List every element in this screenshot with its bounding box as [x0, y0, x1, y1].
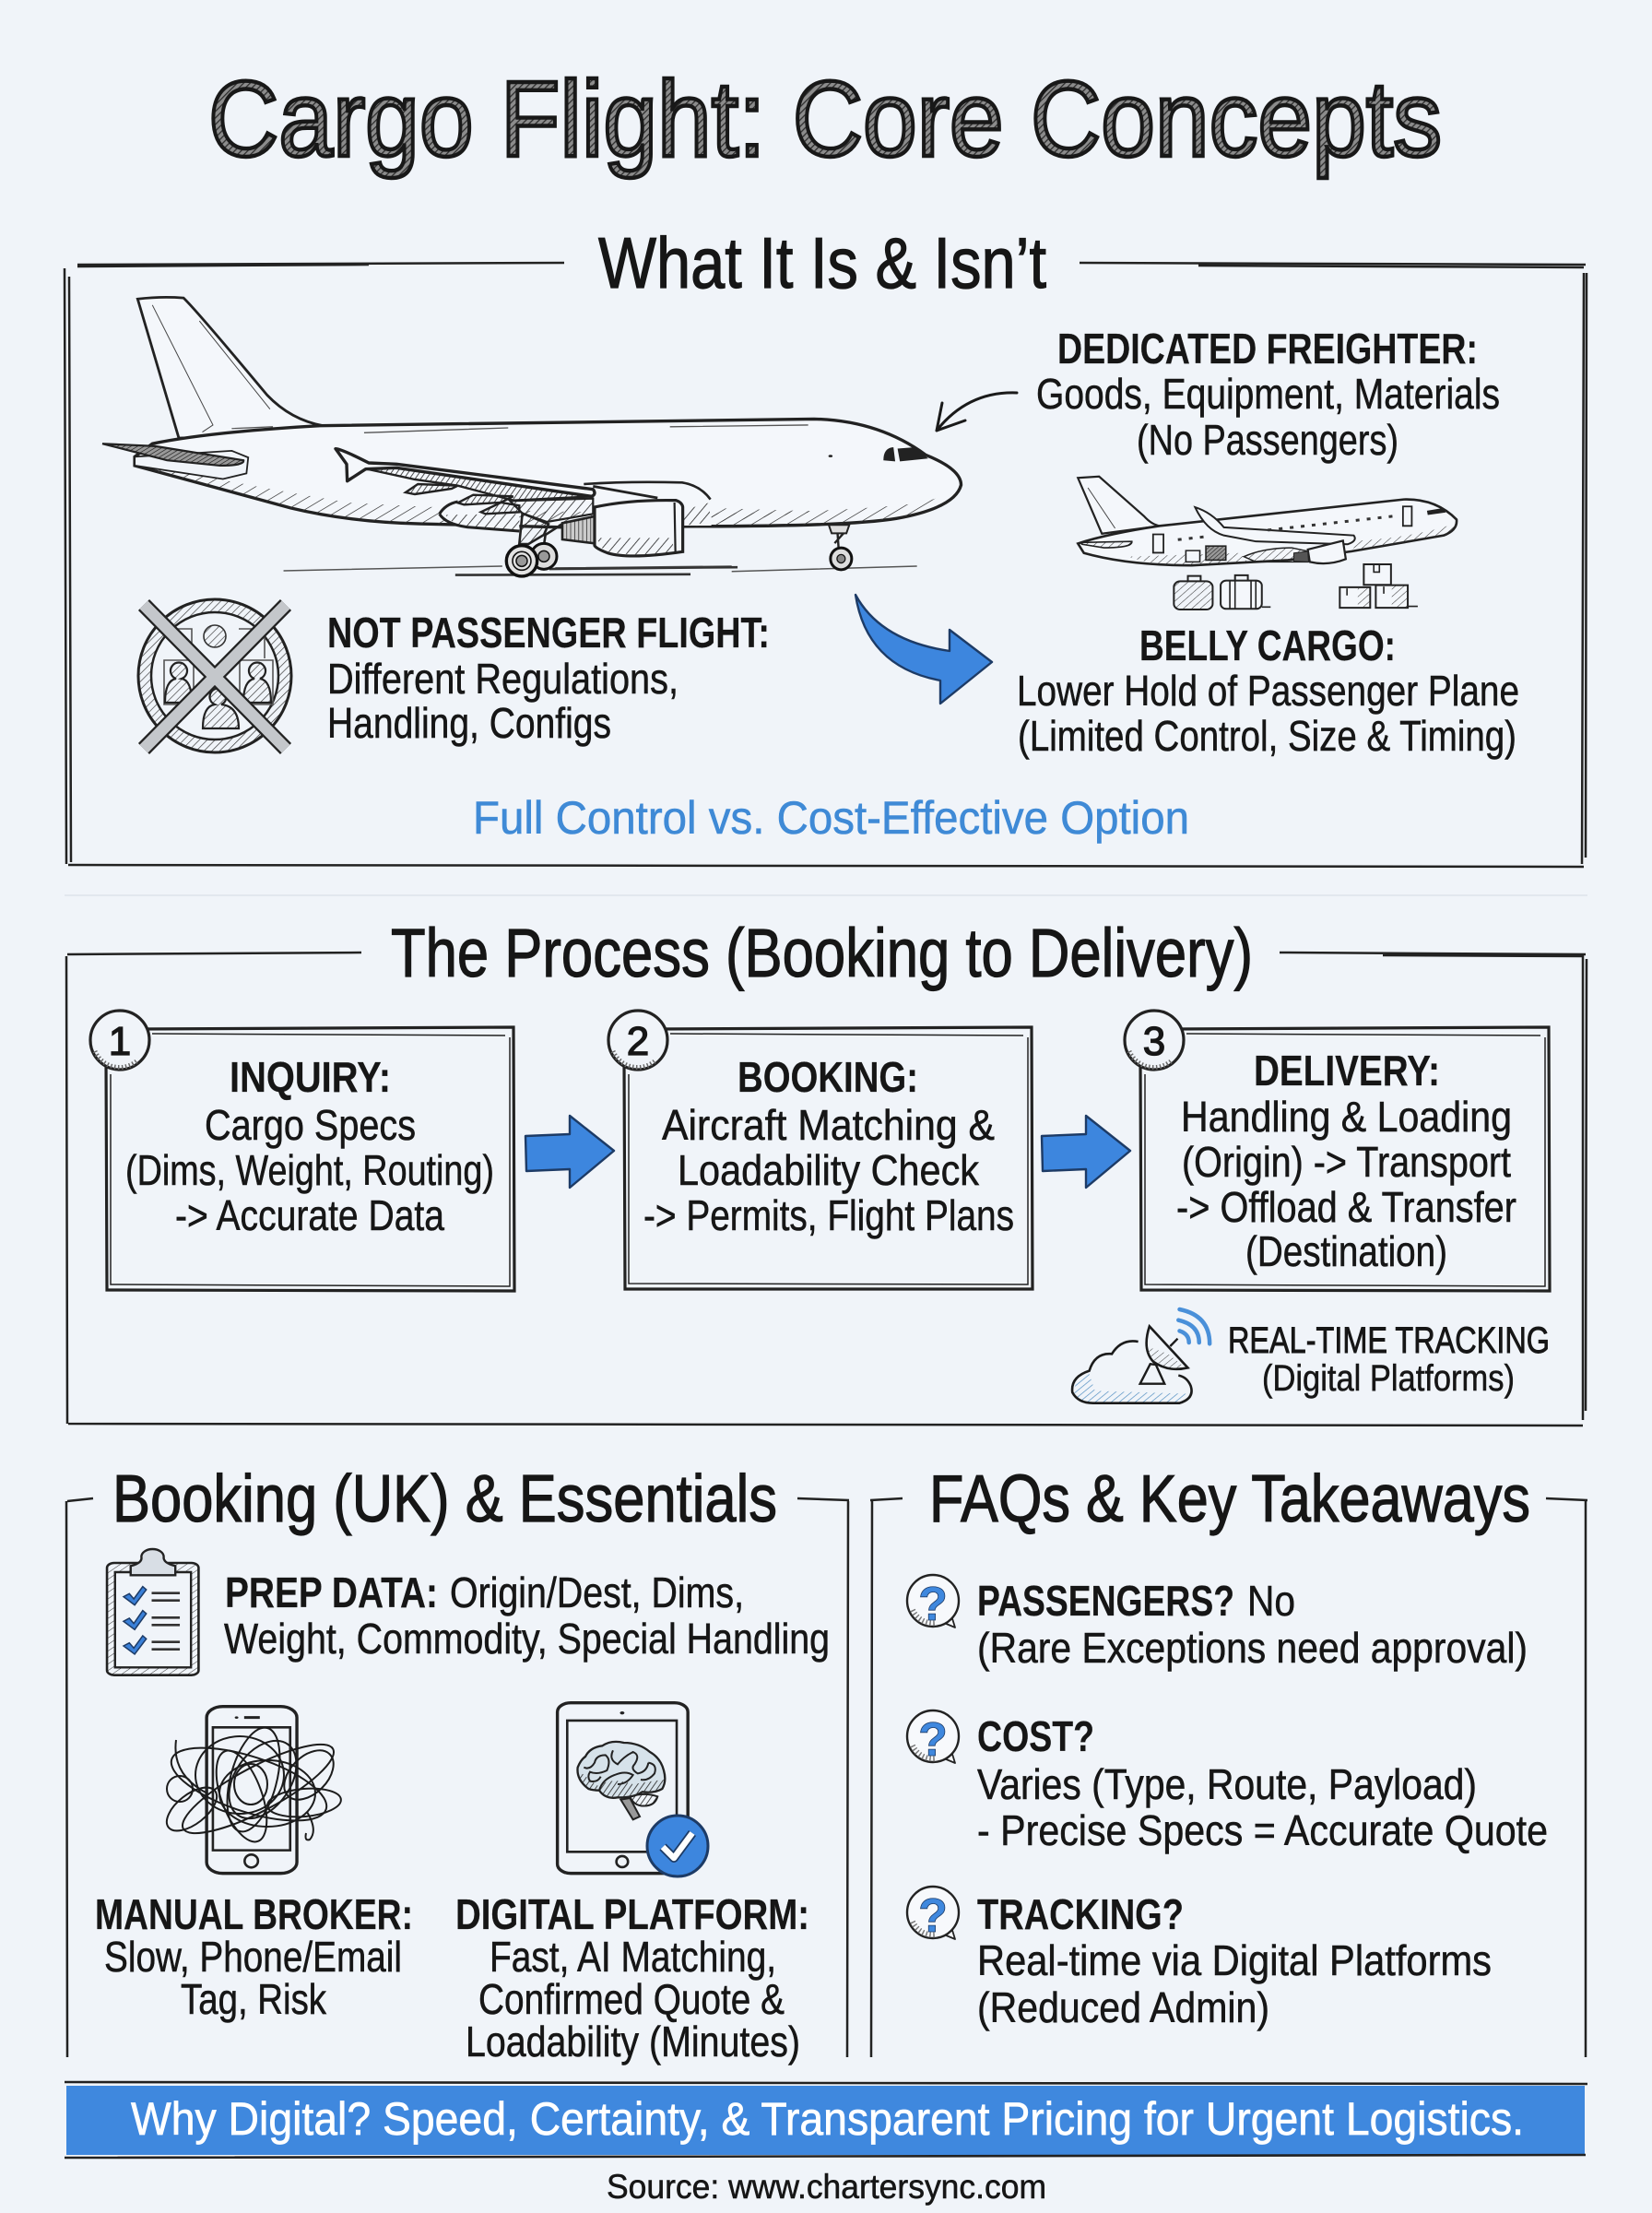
- heading: what it is and isn't: What It Is & Isn’t: [598, 222, 1046, 303]
- text: digital platform: Loadability (Minutes): [466, 2018, 800, 2065]
- text: not passenger flight: Different Regulations,: [327, 655, 678, 703]
- icon: cloud and satellite dish: [1072, 1309, 1210, 1403]
- text: not passenger flight: NOT PASSENGER FLIGHT:: [327, 609, 770, 657]
- step 3: delivery: (Origin) -> Transport: [1182, 1138, 1511, 1186]
- text: prep data: Origin/Dest, Dims,: [450, 1568, 744, 1616]
- text: cost: [977, 1712, 1548, 1854]
- step 3: delivery: Handling & Loading: [1181, 1093, 1512, 1141]
- text: passengers: PASSENGERS?: [977, 1577, 1234, 1625]
- text: dedicated freighter: [1036, 325, 1500, 464]
- text: tracking: Real-time via Digital Platforms: [977, 1936, 1492, 1984]
- icon: question bubble 2: [907, 1710, 959, 1767]
- heading: the process: The Process (Booking to Delivery): [391, 915, 1253, 991]
- text: not passenger flight: Handling, Configs: [327, 699, 611, 747]
- text: manual broker: Slow, Phone/Email: [104, 1933, 402, 1981]
- text: belly cargo: [1017, 621, 1519, 760]
- step 1: inquiry: [90, 1011, 514, 1291]
- arrow: step 2 to 3: [1042, 1116, 1130, 1188]
- arrow: blue curved arrow: [856, 595, 992, 704]
- panel: what it is and isn't: [65, 222, 1587, 867]
- text: manual broker: [95, 1890, 413, 2023]
- main wing, engine and landing gear: [336, 449, 712, 576]
- step 1: inquiry: Cargo Specs: [205, 1101, 416, 1149]
- text: tracking: (Reduced Admin): [977, 1983, 1269, 2031]
- text: dedicated freighter: DEDICATED FREIGHTER:: [1057, 325, 1478, 373]
- step 3: delivery: DELIVERY:: [1254, 1047, 1440, 1095]
- arrow: step 1 to 2: [525, 1116, 614, 1188]
- text: digital platform: DIGITAL PLATFORM:: [455, 1890, 809, 1938]
- banner: why digital: [65, 2082, 1587, 2158]
- text: manual broker: MANUAL BROKER:: [95, 1890, 413, 1938]
- text: digital platform: [455, 1890, 809, 2065]
- text: cost: - Precise Specs = Accurate Quote: [977, 1806, 1548, 1854]
- step 2: booking: Loadability Check: [678, 1146, 980, 1194]
- banner: why digital: Why Digital? Speed, Certainty, & Transparent Pricing for Urgent Logistics.: [131, 2093, 1524, 2145]
- source line: Source: www.chartersync.com: [607, 2168, 1046, 2206]
- text: prep data: PREP DATA:: [225, 1568, 438, 1616]
- panel: faqs and key takeaways: [870, 1462, 1587, 2057]
- text: prep data: [224, 1568, 830, 1663]
- step 3: delivery: -> Offload & Transfer: [1176, 1183, 1516, 1231]
- text: manual broker: Tag, Risk: [181, 1975, 327, 2023]
- icon: question bubble 1: ?: [918, 1578, 948, 1631]
- text: passengers: No: [1247, 1577, 1295, 1625]
- callout: full control vs cost-effective: Full Control vs. Cost-Effective Option: [473, 792, 1189, 844]
- icon: phone with tangled scribble: [159, 1707, 343, 1874]
- icon: question bubble 2: ?: [918, 1713, 948, 1767]
- step 1: inquiry: INQUIRY:: [230, 1053, 391, 1101]
- step 2: booking: -> Permits, Flight Plans: [643, 1191, 1014, 1239]
- text: digital platform: Fast, AI Matching,: [490, 1933, 776, 1981]
- text: belly cargo: BELLY CARGO:: [1139, 621, 1396, 669]
- heading: booking and essentials: Booking (UK) & Essentials: [112, 1462, 777, 1536]
- illustration: passenger plane with belly cargo: [1078, 477, 1457, 609]
- text: dedicated freighter: Goods, Equipment, Materials: [1036, 370, 1500, 418]
- step 2: booking: [608, 1011, 1032, 1289]
- step 3: delivery: 3: [1143, 1019, 1165, 1064]
- text: real-time tracking: [1228, 1320, 1550, 1399]
- text: real-time tracking: REAL-TIME TRACKING: [1228, 1320, 1550, 1361]
- text: prep data: Weight, Commodity, Special Handling: [224, 1615, 830, 1663]
- step 3: delivery: [1125, 1011, 1550, 1291]
- text: digital platform: Confirmed Quote &: [478, 1975, 785, 2023]
- brain: [577, 1742, 665, 1819]
- step 1: inquiry: (Dims, Weight, Routing): [125, 1146, 494, 1194]
- text: passengers: [977, 1577, 1528, 1672]
- text: belly cargo: Lower Hold of Passenger Plane: [1017, 667, 1519, 715]
- step 1: inquiry: 1: [109, 1019, 131, 1064]
- text: cost: Varies (Type, Route, Payload): [977, 1760, 1477, 1808]
- heading: faqs and key takeaways: FAQs & Key Takeaways: [929, 1462, 1530, 1536]
- step 2: booking: 2: [627, 1019, 649, 1064]
- text: tracking: [977, 1890, 1492, 2031]
- panel: booking and essentials: [66, 1462, 849, 2065]
- text: not passenger flight: [327, 609, 770, 747]
- arrow: label to freighter: [937, 393, 1017, 431]
- title: Cargo Flight: Core Concepts: [208, 59, 1442, 179]
- step 2: booking: BOOKING:: [738, 1053, 918, 1101]
- text: belly cargo: (Limited Control, Size & Timing): [1018, 712, 1516, 760]
- text: dedicated freighter: (No Passengers): [1137, 416, 1398, 464]
- text: passengers: (Rare Exceptions need approval): [977, 1624, 1528, 1672]
- icon: question bubble 3: [907, 1887, 959, 1943]
- text: cost: COST?: [977, 1712, 1094, 1760]
- step 1: inquiry: -> Accurate Data: [175, 1191, 444, 1239]
- text: real-time tracking: (Digital Platforms): [1262, 1358, 1515, 1399]
- panel: the process: [66, 915, 1587, 1426]
- icon: question bubble 3: ?: [918, 1889, 948, 1943]
- icon: not passenger flight: [138, 599, 291, 752]
- icon: tablet with brain and check: [558, 1703, 708, 1876]
- step 3: delivery: (Destination): [1245, 1227, 1447, 1275]
- step 2: booking: Aircraft Matching &: [662, 1101, 995, 1149]
- text: tracking: TRACKING?: [977, 1890, 1184, 1938]
- icon: question bubble 1: [907, 1575, 959, 1631]
- icon: clipboard checklist: [107, 1549, 198, 1675]
- illustration: large freighter aircraft: [102, 297, 962, 576]
